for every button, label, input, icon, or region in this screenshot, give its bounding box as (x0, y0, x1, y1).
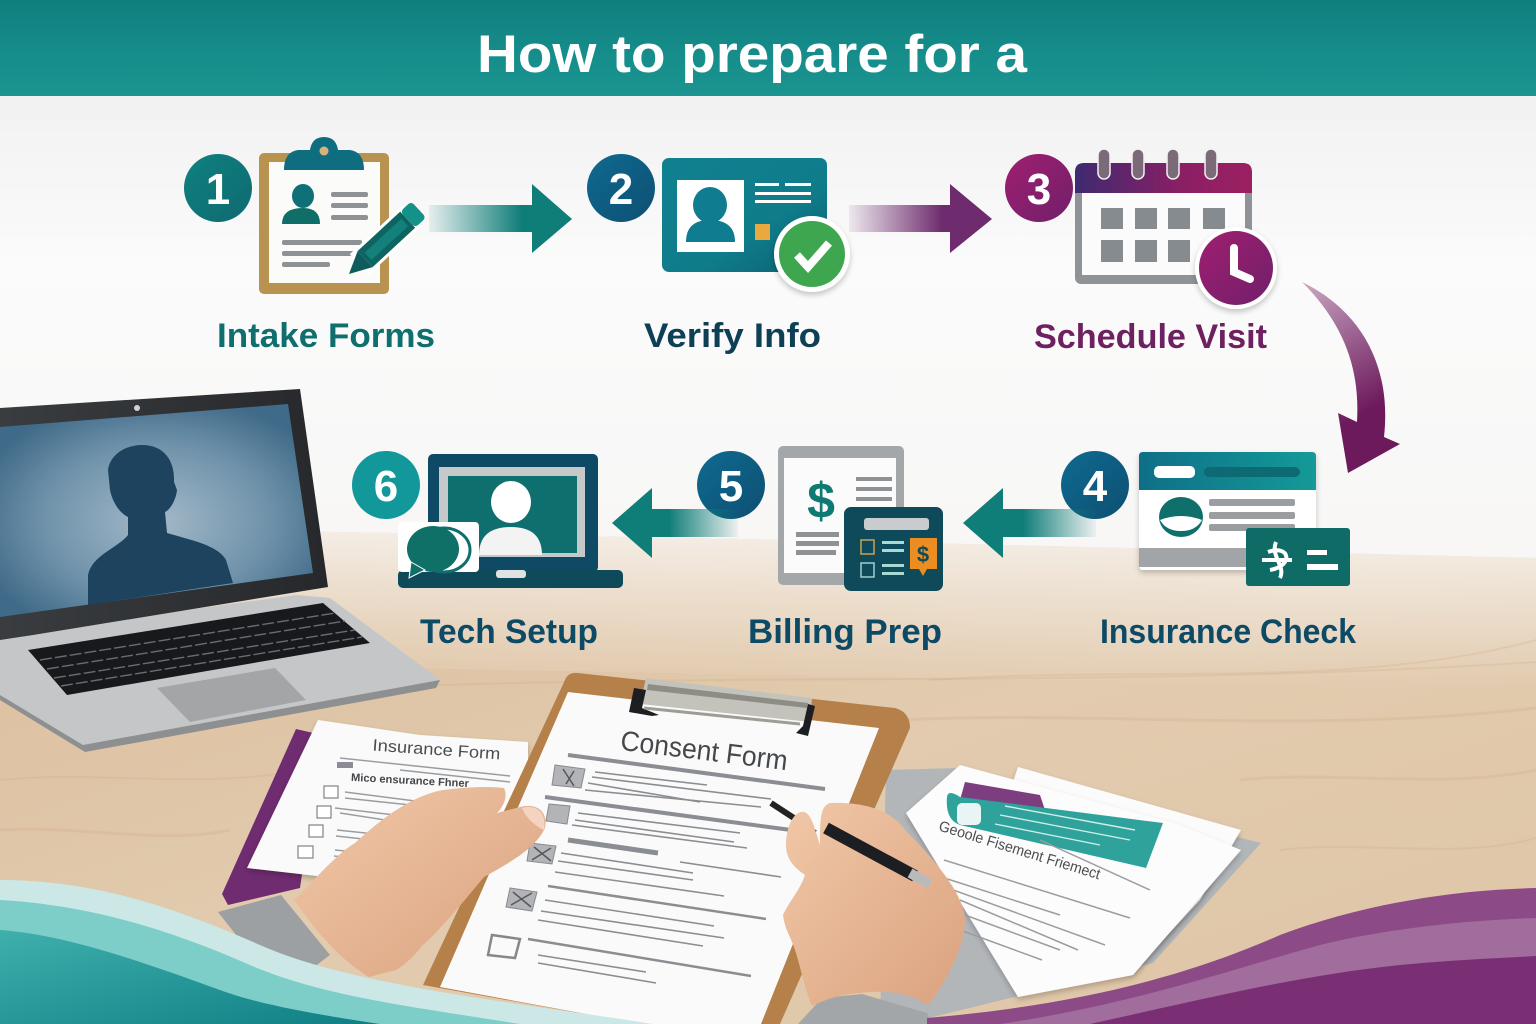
insurance form papers (222, 720, 528, 905)
badge 1: 1 (206, 165, 230, 214)
icon: clipboard with pencil (259, 137, 428, 294)
right hand with pen (771, 803, 965, 1024)
insurance form title: Insurance Form (372, 737, 501, 763)
step 1: intake forms (184, 137, 435, 355)
laptop screen (0, 389, 328, 640)
badge 6 (352, 451, 420, 519)
wooden desk (0, 528, 1536, 1024)
badge 3 (1005, 154, 1073, 222)
left hand (294, 787, 546, 977)
badge 3: 3 (1027, 165, 1051, 214)
badge 5: 5 (719, 462, 743, 511)
insurance form subheading: Mico ensurance Fhner (351, 772, 470, 790)
pen tip (771, 803, 815, 833)
badge 6: 6 (374, 462, 398, 511)
consent form heading: Consent Form (619, 725, 789, 776)
title banner (0, 0, 1536, 96)
fine print heading: Geoole Fisement Friemect (937, 818, 1103, 883)
step 6: tech setup (352, 451, 623, 651)
icon: video laptop with chat (398, 454, 623, 588)
insurance form sheet (247, 720, 528, 890)
bottom right purple wave (927, 888, 1536, 1024)
clipboard board (423, 673, 910, 1024)
consent form clipboard (423, 673, 910, 1024)
bottom left teal wave (0, 880, 653, 1024)
badge 5 (697, 451, 765, 519)
badge 2: 2 (609, 165, 633, 214)
label: billing prep: Billing Prep (748, 613, 942, 651)
title: How to prepare for a (477, 25, 1028, 84)
right side papers (880, 765, 1261, 1024)
arrow 4 to 5 (963, 488, 1096, 558)
teal info card (947, 793, 1163, 868)
icon: id card with check (662, 158, 850, 292)
metal clip (629, 678, 815, 736)
left hand holding clipboard (218, 787, 546, 985)
wall background (0, 90, 1536, 590)
arrow 2 to 3 (849, 184, 992, 253)
icon: invoice and bill card (778, 446, 943, 591)
arrow 1 to 2 (429, 184, 572, 253)
label: schedule visit: Schedule Visit (1034, 318, 1267, 356)
step 5: billing prep (697, 446, 943, 651)
laptop base (0, 595, 440, 752)
icon: invoice and bill card: $ (807, 473, 835, 529)
right sleeve (798, 994, 932, 1024)
step 4: insurance check (1061, 451, 1356, 651)
form rules and checkboxes (488, 755, 825, 983)
consent sheet (440, 692, 879, 1024)
right hand (783, 803, 965, 1006)
icon: invoice and bill card: $ (917, 542, 929, 567)
label: tech setup: Tech Setup (420, 613, 598, 651)
pen body (826, 828, 930, 884)
step 3: schedule visit (1005, 149, 1277, 356)
left sleeve (218, 895, 330, 985)
badge 1 (184, 154, 252, 222)
silhouette on screen (88, 445, 233, 605)
badge 2 (587, 154, 655, 222)
label: insurance check: Insurance Check (1100, 613, 1356, 651)
icon: insurance window and card (1139, 452, 1350, 586)
arrow 5 to 6 (612, 488, 738, 558)
curved arrow 3 to 4 (1302, 282, 1400, 473)
badge 4 (1061, 451, 1129, 519)
badge 4: 4 (1083, 462, 1108, 511)
label: verify info: Verify Info (644, 317, 821, 355)
icon: calendar with clock (1075, 149, 1277, 309)
laptop photo (0, 389, 440, 752)
step 2: verify info (587, 154, 850, 355)
purple folder (222, 729, 322, 905)
label: intake forms: Intake Forms (217, 317, 435, 355)
